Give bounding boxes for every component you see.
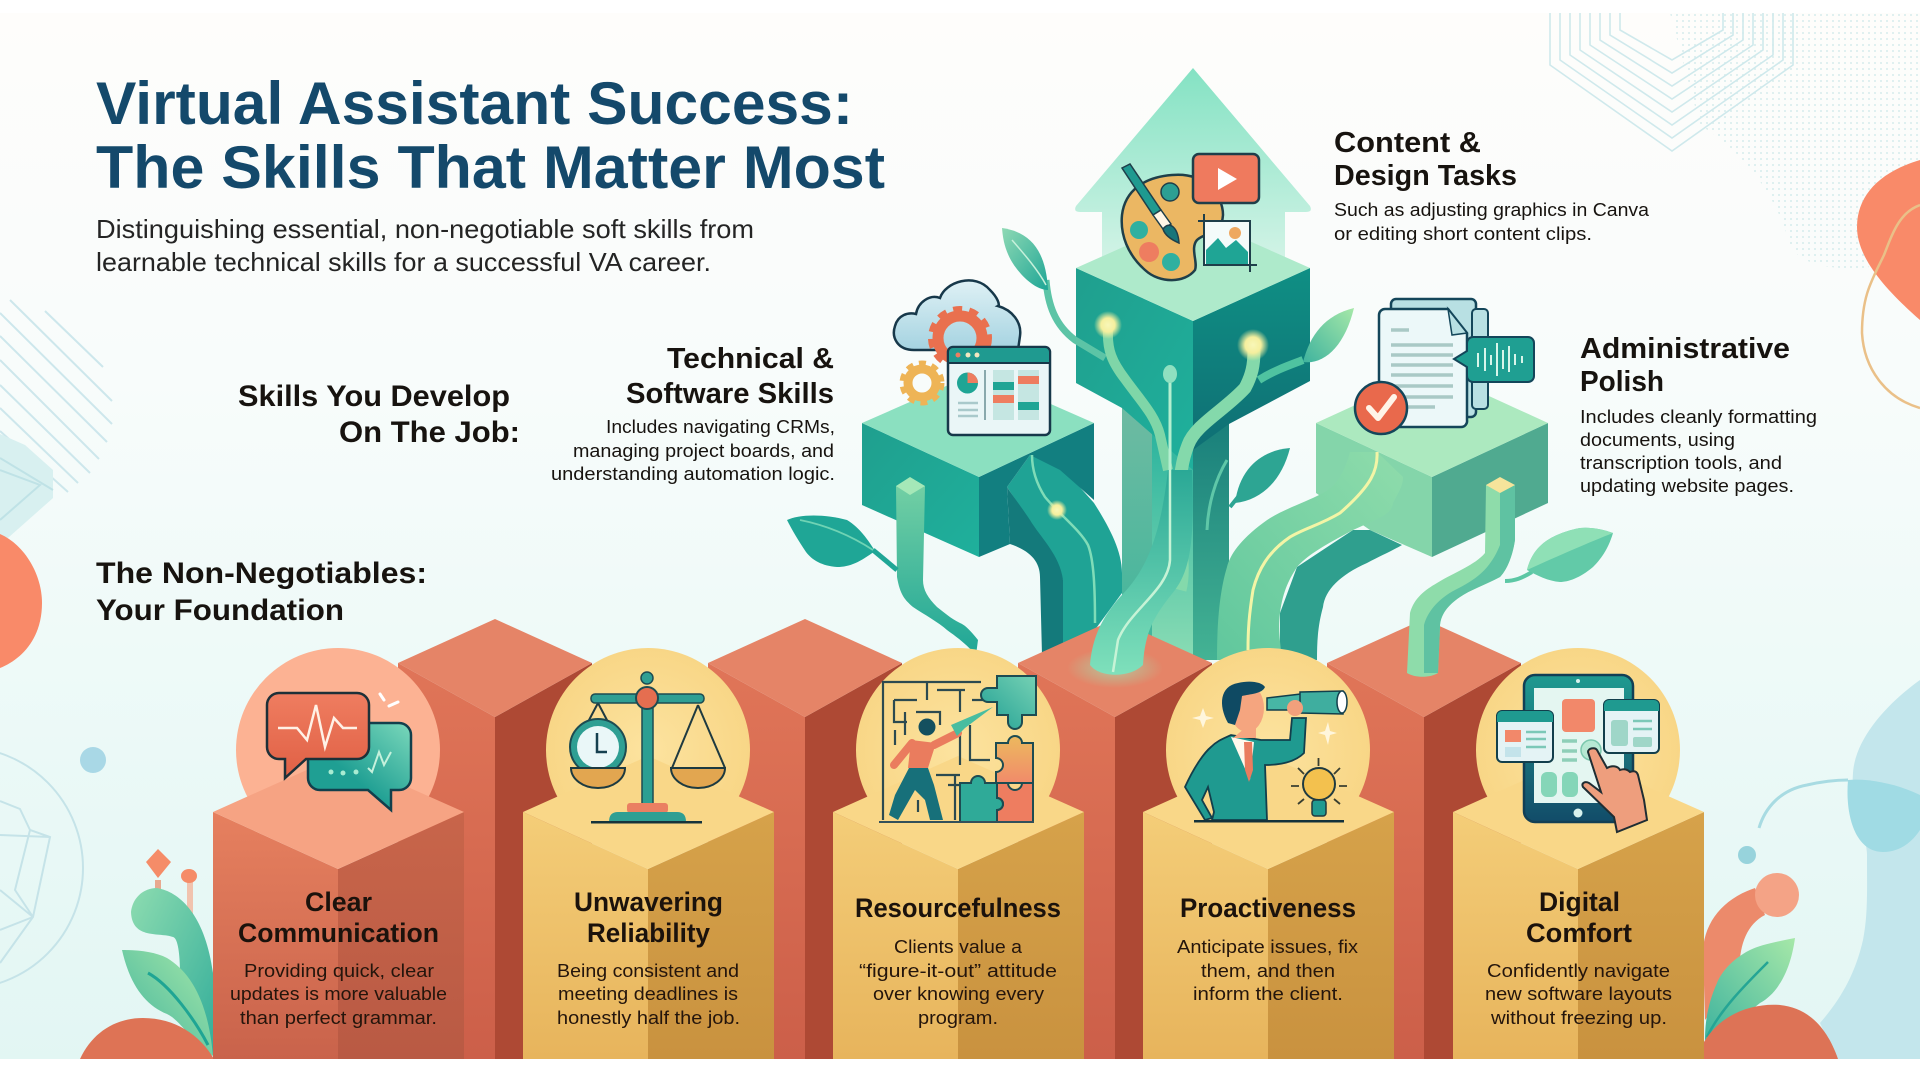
- text: unwavering reliability: Being consistent and: [557, 960, 739, 981]
- decoration: coral blob left: [0, 534, 42, 668]
- text: digital comfort: Digital: [1539, 887, 1620, 917]
- decoration: pale cube left: [0, 434, 53, 545]
- back pillar 2: [708, 619, 902, 1059]
- vine: glowing right branch: [1179, 308, 1354, 590]
- heading: skills you develop on the job: Skills You Develop: [238, 380, 510, 413]
- right vine with leaf: [1407, 477, 1613, 677]
- left block stem light: [1047, 500, 1067, 520]
- small leaf beside column: [1207, 448, 1290, 530]
- text: digital comfort: new software layouts: [1485, 983, 1672, 1004]
- text: resourcefulness: Resourcefulness: [855, 893, 1061, 923]
- text: administrative polish: [1580, 333, 1817, 496]
- text: content and design tasks: Such as adjusting graphics in Canva: [1334, 199, 1650, 220]
- decoration: circle and wireframe left: [0, 747, 83, 989]
- text: administrative polish: Administrative: [1580, 333, 1790, 365]
- text: digital comfort: Confidently navigate: [1487, 960, 1670, 981]
- back pillar 1: [398, 619, 592, 1059]
- left block: [862, 372, 1094, 557]
- text: proactiveness: Anticipate issues, fix: [1177, 936, 1359, 957]
- heading: skills you develop on the job: On The Job:: [339, 416, 520, 449]
- text: technical and software skills: [551, 343, 835, 484]
- base glow on pillar: [1067, 648, 1163, 688]
- decoration: teal dot right: [1738, 846, 1756, 864]
- subtitle: Distinguishing essential, non-negotiable soft skills from: [96, 214, 754, 244]
- decoration: hexagon line pattern: [1550, 13, 1793, 151]
- pillar: Clear Communication: [213, 756, 464, 1059]
- decoration: plant left: [122, 849, 213, 1056]
- text: proactiveness: inform the client.: [1193, 983, 1343, 1004]
- text: unwavering reliability: Unwavering: [574, 887, 723, 917]
- white band top: [0, 0, 1920, 13]
- text: administrative polish: Polish: [1580, 366, 1664, 398]
- text: resourcefulness: over knowing every: [873, 983, 1045, 1004]
- pillar: Digital Comfort: [1453, 756, 1704, 1059]
- back pillar 3: [1018, 619, 1212, 1059]
- title: Virtual Assistant Success:: [96, 70, 853, 137]
- central base vine: [1090, 470, 1193, 675]
- text: resourcefulness: “figure-it-out” attitude: [859, 960, 1057, 981]
- text: proactiveness: Proactiveness: [1180, 893, 1356, 923]
- text: technical and software skills: managing project boards, and: [573, 440, 834, 461]
- icon: documents, audio and check: [1355, 299, 1534, 434]
- right big stem dark band: [1280, 530, 1402, 660]
- text: resourcefulness: [855, 893, 1061, 1028]
- text: administrative polish: updating website pages.: [1580, 475, 1794, 496]
- subtitle: [96, 214, 754, 277]
- icon: tablet with windows and hand: [1497, 675, 1659, 832]
- vine light dots: [1094, 311, 1269, 383]
- icon: speech bubbles: [267, 693, 411, 810]
- decoration: blue dot left: [80, 747, 106, 773]
- icon circle backdrops: [236, 648, 1680, 852]
- decoration: dotted blob top right: [1670, 13, 1920, 268]
- central tower: [1076, 216, 1310, 470]
- decoration: diagonal lines left: [0, 300, 112, 492]
- vine: center line: [1113, 380, 1170, 670]
- text: resourcefulness: Clients value a: [894, 936, 1023, 957]
- decoration: tan outline curve: [1862, 205, 1920, 408]
- text: administrative polish: transcription tools, and: [1580, 452, 1782, 473]
- text: administrative polish: documents, using: [1580, 429, 1735, 450]
- heading: skills you develop on the job: [238, 380, 520, 449]
- central column: [1122, 400, 1229, 660]
- left block stem: [1007, 455, 1122, 660]
- right big stem glow line: [1248, 452, 1377, 650]
- text: resourcefulness: program.: [918, 1007, 998, 1028]
- text: clear communication: than perfect grammar.: [240, 1007, 437, 1028]
- right block: [1316, 370, 1548, 557]
- pillar: Resourcefulness: [833, 756, 1084, 1059]
- text: technical and software skills: understanding automation logic.: [551, 463, 835, 484]
- text: technical and software skills: Technical &: [667, 343, 834, 375]
- text: digital comfort: [1485, 887, 1672, 1028]
- heading: the non-negotiables: [96, 557, 427, 627]
- decoration: thin arc right: [1759, 780, 1848, 828]
- decoration: blue shape right: [1820, 680, 1920, 1059]
- subtitle: learnable technical skills for a successful VA career.: [96, 247, 711, 277]
- left block stem highlight on face: [1032, 455, 1095, 623]
- text: clear communication: Clear: [305, 887, 372, 917]
- icon: balance scale and clock: [570, 672, 725, 824]
- icon: cloud, gears and dashboard: [894, 280, 1050, 435]
- title: [96, 70, 885, 201]
- text: clear communication: [230, 887, 447, 1028]
- text: unwavering reliability: honestly half the job.: [557, 1007, 740, 1028]
- pillar: Proactiveness: [1143, 756, 1394, 1059]
- text: digital comfort: Comfort: [1526, 918, 1632, 948]
- text: content and design tasks: or editing short content clips.: [1334, 223, 1592, 244]
- decoration: coral mound right: [1700, 1005, 1838, 1059]
- text: clear communication: Communication: [238, 918, 439, 948]
- arrow behind central tower: [1075, 68, 1311, 270]
- decoration: darker blue shape right: [1847, 780, 1920, 852]
- text: unwavering reliability: Reliability: [587, 918, 710, 948]
- title: The Skills That Matter Most: [96, 134, 885, 201]
- text: administrative polish: Includes cleanly formatting: [1580, 406, 1817, 427]
- right big stem: [1217, 452, 1403, 660]
- text: unwavering reliability: meeting deadlines is: [558, 983, 738, 1004]
- icon: palette, video and image: [1122, 154, 1259, 280]
- text: proactiveness: [1177, 893, 1359, 1004]
- back pillar 4: [1327, 619, 1521, 1059]
- text: technical and software skills: Software Skills: [626, 378, 834, 410]
- text: content and design tasks: [1334, 127, 1650, 244]
- decoration: coral blob right: [1857, 160, 1920, 320]
- text: digital comfort: without freezing up.: [1490, 1007, 1667, 1028]
- left vine with leaf: [787, 477, 978, 655]
- text: unwavering reliability: [557, 887, 740, 1028]
- decoration: plant right: [1703, 873, 1799, 1040]
- text: content and design tasks: Design Tasks: [1334, 160, 1517, 192]
- text: technical and software skills: Includes navigating CRMs,: [606, 416, 835, 437]
- heading: the non-negotiables: The Non-Negotiables:: [96, 557, 427, 590]
- decoration: coral mound left: [80, 1018, 214, 1059]
- heading: the non-negotiables: Your Foundation: [96, 594, 344, 627]
- icon: person with telescope and bulb: [1185, 682, 1347, 822]
- text: clear communication: Providing quick, clear: [244, 960, 434, 981]
- white band bottom: [0, 1059, 1920, 1072]
- icon: maze and puzzle: [879, 676, 1036, 823]
- text: clear communication: updates is more valuable: [230, 983, 447, 1004]
- vine: glowing left branch: [1108, 330, 1168, 470]
- text: proactiveness: them, and then: [1201, 960, 1335, 981]
- text: content and design tasks: Content &: [1334, 127, 1481, 159]
- vine: top left leaf: [1002, 228, 1105, 358]
- pillar: Unwavering Reliability: [523, 756, 774, 1059]
